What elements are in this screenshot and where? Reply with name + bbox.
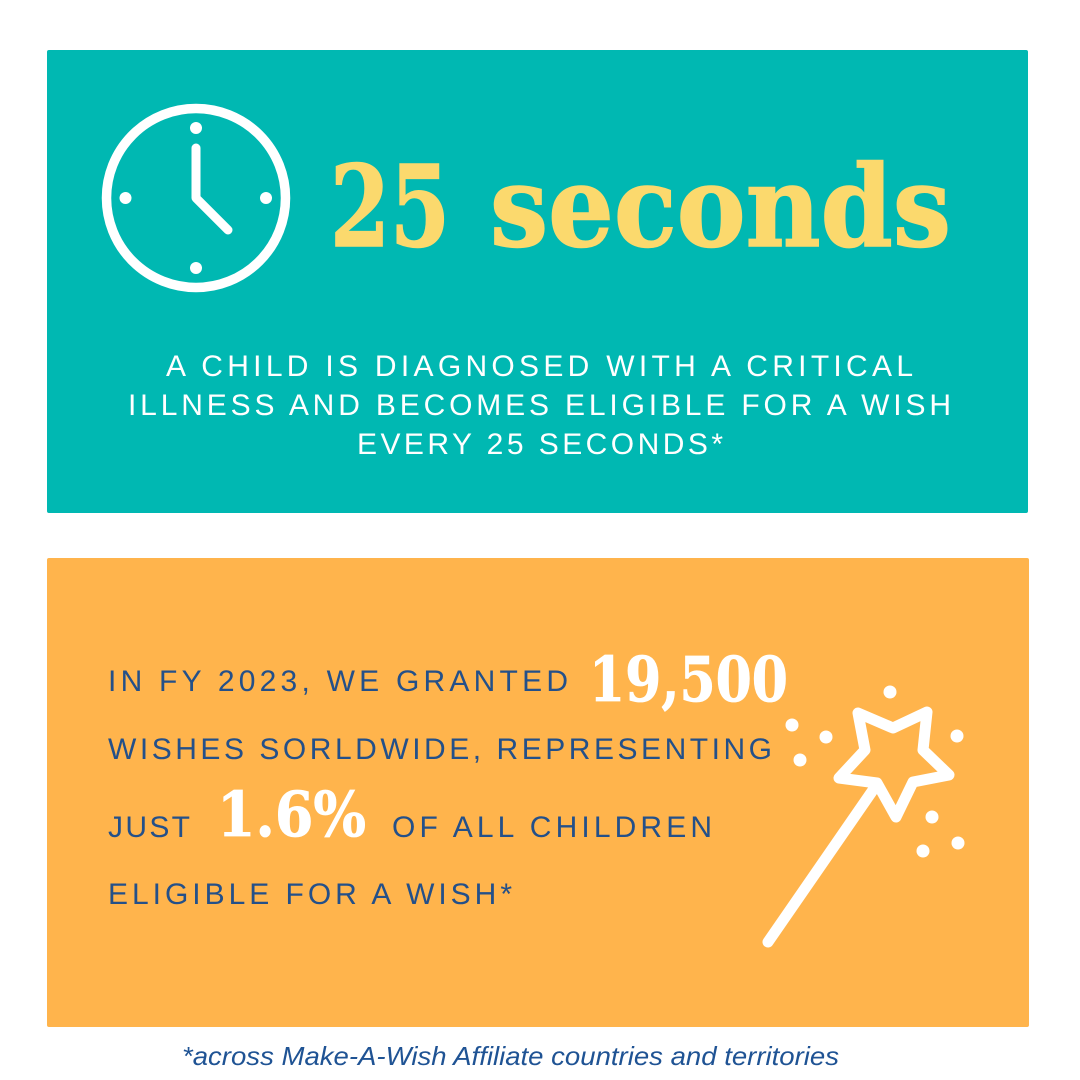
- text: diagnosis statement: EVERY 25 SECONDS*: [357, 428, 723, 461]
- text: diagnosis statement: A CHILD IS DIAGNOSED WITH A CRITICAL: [166, 350, 913, 383]
- icon: magic wand: [768, 686, 964, 942]
- panel: teal statistic: [47, 50, 1028, 513]
- text: wishes granted statement: ELIGIBLE FOR A WISH*: [108, 878, 512, 911]
- text: wishes granted statement: OF ALL CHILDREN: [392, 811, 712, 844]
- heading: 25 seconds: seconds: [490, 142, 951, 273]
- footnote: *across Make-A-Wish Affiliate countries and territories: [182, 1041, 839, 1071]
- text: wishes granted statement: JUST: [108, 811, 190, 844]
- panel: orange statistic: [47, 558, 1029, 1027]
- icon: clock: [106, 108, 286, 288]
- text: wishes granted statement: IN FY 2023, WE GRANTED: [108, 665, 568, 698]
- text: diagnosis statement: ILLNESS AND BECOMES ELIGIBLE FOR A WISH: [128, 389, 951, 422]
- text: wishes granted statement: WISHES SORLDWIDE, REPRESENTING: [108, 733, 772, 766]
- text: diagnosis statement: [128, 350, 951, 461]
- text: wishes granted statement: [108, 643, 788, 911]
- heading: 25 seconds: [330, 142, 951, 273]
- number: 1.6%: 1.6%: [217, 778, 366, 851]
- heading: 25 seconds: 25: [330, 142, 450, 273]
- number: 19,500: 19,500: [589, 643, 788, 716]
